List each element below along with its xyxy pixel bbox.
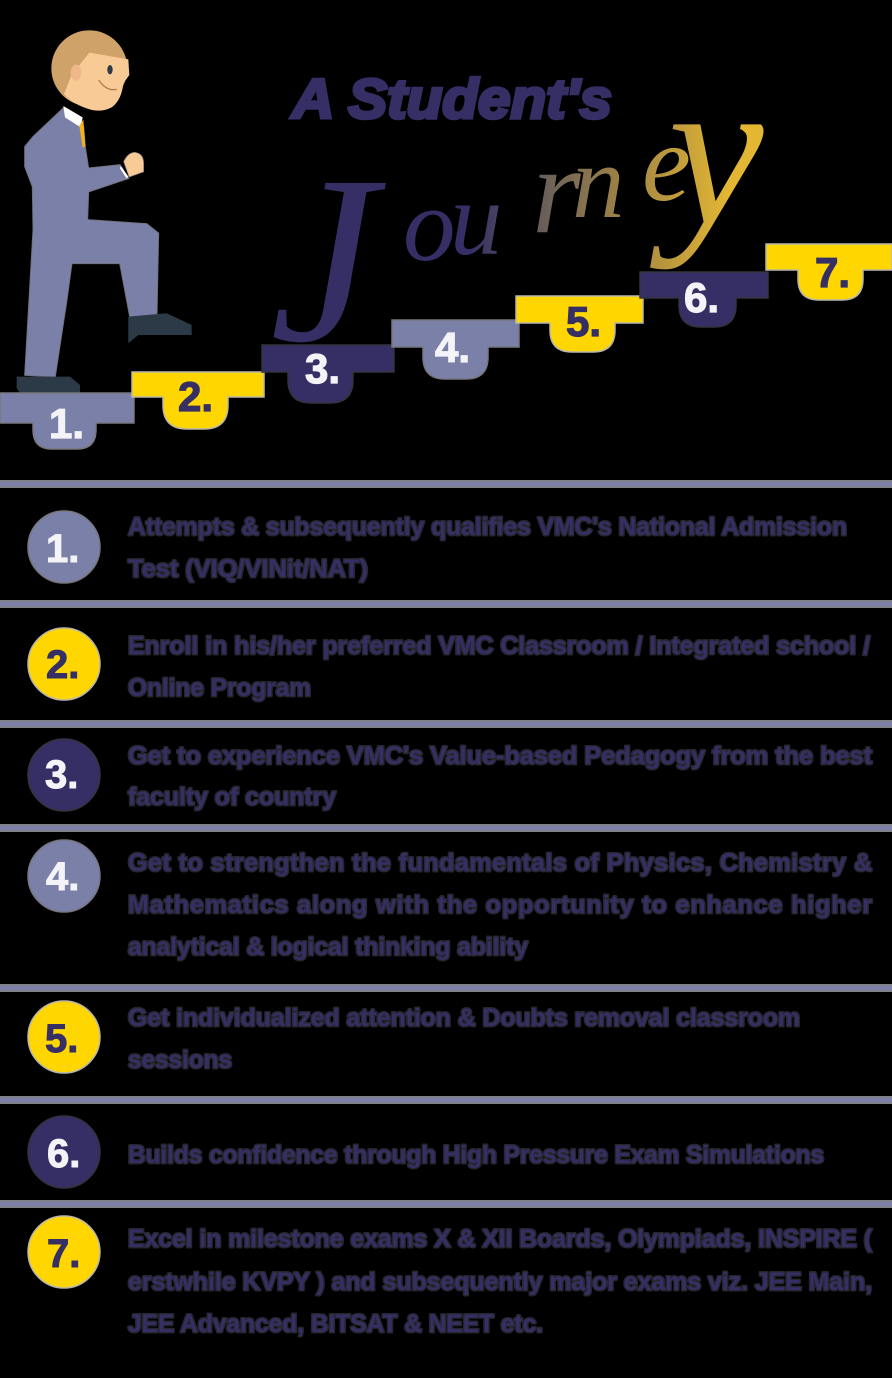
list item 2: Online Program — [128, 674, 311, 702]
step 3 — [262, 345, 394, 403]
hand — [124, 153, 143, 177]
list item 7: JEE Advanced, BITSAT & NEET etc. — [128, 1310, 543, 1338]
list item 2: 2. — [46, 643, 79, 687]
smile — [99, 80, 117, 90]
list item 6: Builds confidence through High Pressure Exam Simulations — [128, 1141, 824, 1169]
step 2: 2. — [178, 373, 213, 420]
list item 1 — [28, 511, 847, 583]
heading: Journey script: o — [403, 166, 456, 283]
hair — [51, 30, 127, 106]
list item 5 — [28, 1001, 800, 1074]
list item 1: Test (VIQ/VINit/NAT) — [128, 555, 368, 583]
list item 3 — [28, 739, 873, 811]
step 3: 3. — [305, 345, 340, 392]
list item 5: sessions — [128, 1046, 232, 1074]
cuff — [120, 166, 128, 179]
suit — [25, 108, 158, 377]
heading: Journey script: e — [642, 102, 691, 224]
list item 3: Get to experience VMC's Value-based Pedagogy from the best — [128, 742, 873, 770]
list item 7: Excel in milestone exams X & XII Boards, Olympiads, INSPIRE ( — [128, 1225, 873, 1253]
list item 6: 6. — [47, 1132, 80, 1176]
step 5: 5. — [566, 298, 601, 345]
collar — [63, 106, 83, 127]
step 4: 4. — [435, 324, 470, 371]
step 2 — [132, 372, 264, 429]
tie — [79, 119, 85, 147]
list item 1: 1. — [46, 527, 79, 571]
list item 6 — [28, 1116, 824, 1188]
shoes — [17, 313, 192, 395]
heading: Journey script: n — [572, 123, 624, 240]
list item 4: analytical & logical thinking ability — [128, 933, 528, 961]
heading: Journey script: u — [450, 160, 502, 277]
list item 2: Enroll in his/her preferred VMC Classroom / Integrated school / — [128, 632, 870, 660]
list item 7: erstwhile KVPY ) and subsequently major exams viz. JEE Main, — [128, 1268, 872, 1296]
step 1: 1. — [49, 400, 84, 447]
list item 2 — [28, 628, 870, 702]
eye — [107, 65, 113, 74]
heading: Journey script: J — [270, 126, 386, 392]
list item 3: 3. — [45, 753, 78, 797]
step 6 — [640, 272, 768, 327]
list item 3: faculty of country — [128, 783, 336, 811]
list item 1: Attempts & subsequently qualifies VMC's National Admission — [128, 513, 847, 541]
ear — [71, 65, 81, 81]
list item 4: Mathematics along with the opportunity to enhance higher — [128, 891, 872, 919]
list item 7: 7. — [47, 1232, 80, 1276]
step 6: 6. — [684, 274, 719, 321]
list item 4: Get to strengthen the fundamentals of Physics, Chemistry & — [128, 849, 872, 877]
step 4 — [392, 320, 519, 379]
step 7: 7. — [815, 249, 850, 296]
heading: A Student's: A Student's — [290, 67, 612, 130]
step 5 — [516, 296, 643, 352]
heading: Journey script: r — [532, 122, 582, 260]
face — [64, 53, 129, 111]
step 1 — [0, 393, 134, 449]
list item 5: Get individualized attention & Doubts removal classroom — [128, 1004, 800, 1032]
step 7 — [766, 244, 892, 300]
illustration: student climbing steps — [17, 30, 192, 395]
heading: Journey script: y — [650, 31, 764, 270]
list item 5: 5. — [45, 1017, 78, 1061]
list item 4: 4. — [46, 855, 79, 899]
list item 7 — [28, 1216, 873, 1338]
list item 4 — [28, 840, 872, 961]
